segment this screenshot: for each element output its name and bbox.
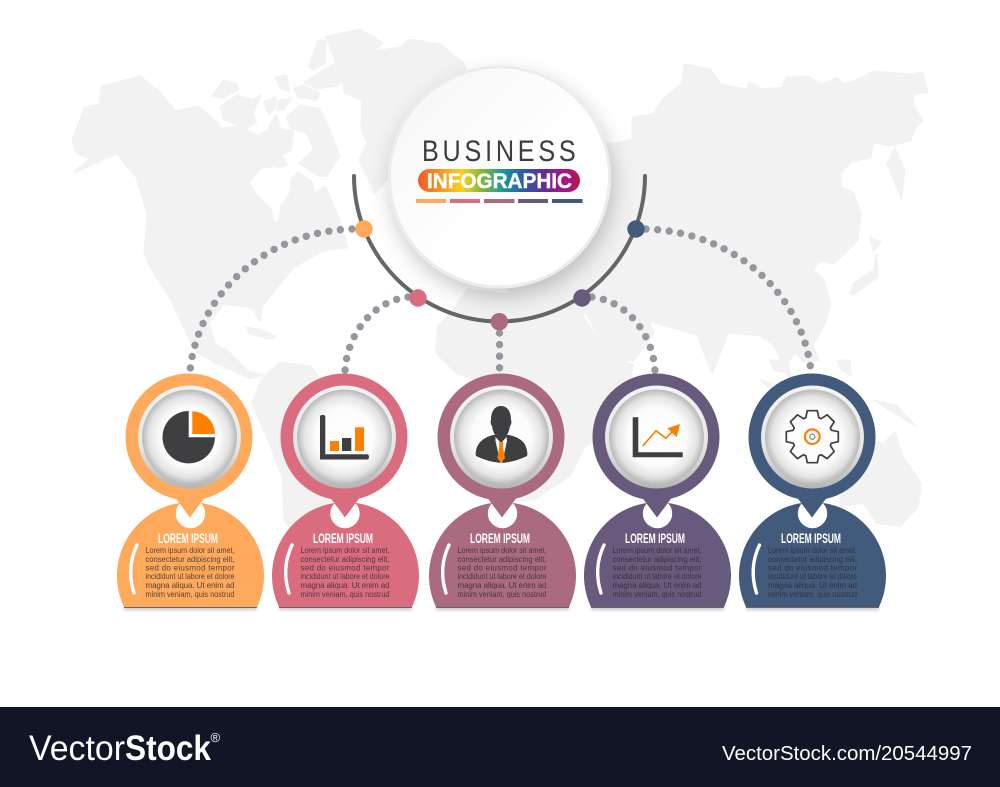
map: north america <box>73 77 347 378</box>
step 2 heading: LOREM IPSUM <box>313 531 373 546</box>
step 4 body text: consectetur adipiscing elit, <box>612 555 702 564</box>
pill background <box>418 169 580 192</box>
map: caribbean <box>247 328 275 338</box>
footer logo: Vector <box>29 729 125 768</box>
step 4 body text: minim veniam, quis nostrud <box>612 590 702 599</box>
step 1 body text: Lorem ipsum dolor sit amet, <box>146 546 234 555</box>
step 1 body text: sed do eiusmod tempor <box>146 564 235 572</box>
icon: bar chart <box>320 415 369 460</box>
step 1 body text: consectetur adipiscing elit, <box>146 555 234 564</box>
step 5 body text: incididunt ut labore et dolore <box>768 572 857 581</box>
step 4 gloss <box>598 545 604 593</box>
footer image id: VectorStock.com/20544997 <box>722 743 972 765</box>
step 1 body text: incididunt ut labore et dolore <box>146 572 235 581</box>
connector: step 1 <box>190 229 352 372</box>
world map <box>73 30 927 540</box>
node 3 <box>491 313 508 330</box>
step 4 body text: sed do eiusmod tempor <box>612 564 702 572</box>
step 3 body text: magna aliqua. Ut enim ad <box>458 581 546 590</box>
footer bar <box>0 707 1000 787</box>
step 3 body text: consectetur adipiscing elit, <box>458 555 546 564</box>
step 3 heading: LOREM IPSUM <box>470 531 530 546</box>
step 2 body text: Lorem ipsum dolor sit amet, <box>300 546 390 555</box>
step 5 body text: Lorem ipsum dolor sit amet, <box>768 546 857 555</box>
step 4 heading: LOREM IPSUM <box>625 531 685 546</box>
step 2 body text: consectetur adipiscing elit, <box>300 555 390 564</box>
step 4 body text: Lorem ipsum dolor sit amet, <box>612 546 702 555</box>
footer logo <box>29 729 211 768</box>
step 1 heading: LOREM IPSUM <box>158 531 218 546</box>
central arc <box>354 176 645 321</box>
step 2 body text <box>300 546 390 599</box>
step 3 body text: Lorem ipsum dolor sit amet, <box>458 546 546 555</box>
step 1 gloss <box>131 545 137 593</box>
connector: step 4 <box>592 297 655 372</box>
colour key <box>416 199 582 203</box>
icon: growth chart <box>633 417 683 457</box>
heading: business: BUSINESS <box>422 134 576 167</box>
icon: pie chart <box>163 411 215 463</box>
node 1 <box>355 220 373 238</box>
node 4 <box>573 289 591 307</box>
step 5 body text: sed do eiusmod tempor <box>768 564 857 572</box>
icon: businessman <box>476 406 527 463</box>
step 3 body text <box>458 546 547 599</box>
step 5 body text <box>768 546 857 599</box>
connector: step 5 <box>646 229 811 372</box>
step 4 body text: incididunt ut labore et dolore <box>612 572 702 581</box>
central circle <box>390 67 610 287</box>
step 1 body text <box>146 546 235 599</box>
map: south america <box>253 363 385 540</box>
dotted connectors <box>190 229 811 372</box>
step 5 body text: minim veniam, quis nostrud <box>768 590 857 599</box>
footer registered mark: ® <box>210 730 220 745</box>
step 2 gloss <box>286 545 292 593</box>
step 3 body text: sed do eiusmod tempor <box>458 564 547 572</box>
connector: step 3 <box>496 333 503 372</box>
step 2 body text: sed do eiusmod tempor <box>300 564 390 572</box>
step 2 body text: incididunt ut labore et dolore <box>300 572 390 581</box>
heading: infographic: INFOGRAPHIC <box>427 170 572 193</box>
step 1 body text: minim veniam, quis nostrud <box>146 590 234 599</box>
icon: gear <box>786 411 838 463</box>
step 5 heading: LOREM IPSUM <box>781 531 841 546</box>
title block <box>416 134 582 203</box>
map: africa <box>437 290 632 500</box>
map: europe <box>343 40 480 200</box>
connector: step 2 <box>345 297 408 372</box>
map: asia <box>500 65 927 385</box>
step 3 gloss <box>443 545 449 593</box>
step 5 body text: consectetur adipiscing elit, <box>768 555 857 564</box>
step 2 body text: minim veniam, quis nostrud <box>300 590 390 599</box>
step 4 body text <box>612 546 702 599</box>
node 2 <box>409 289 427 307</box>
step 5 gloss <box>753 545 760 593</box>
panel: step 4 purple <box>584 374 731 610</box>
panel: step 2 pink <box>272 374 419 610</box>
step 1 body text: magna aliqua. Ut enim ad <box>146 581 234 590</box>
panel: step 5 blue <box>739 374 886 610</box>
step 2 body text: magna aliqua. Ut enim ad <box>300 581 390 590</box>
map: kamchatka and japan <box>850 147 905 295</box>
map: arctic islands <box>212 40 345 257</box>
map: greenland <box>305 30 382 88</box>
node 5 <box>627 220 645 238</box>
step 3 body text: incididunt ut labore et dolore <box>458 572 547 581</box>
step 3 body text: minim veniam, quis nostrud <box>458 590 546 599</box>
step 4 body text: magna aliqua. Ut enim ad <box>612 581 702 590</box>
step 5 body text: magna aliqua. Ut enim ad <box>768 581 857 590</box>
map: australia and islands <box>760 360 922 527</box>
panel: step 3 mauve <box>429 374 576 610</box>
arc nodes <box>355 220 645 330</box>
footer logo: Stock <box>125 729 211 768</box>
panel: step 1 orange <box>117 374 264 610</box>
